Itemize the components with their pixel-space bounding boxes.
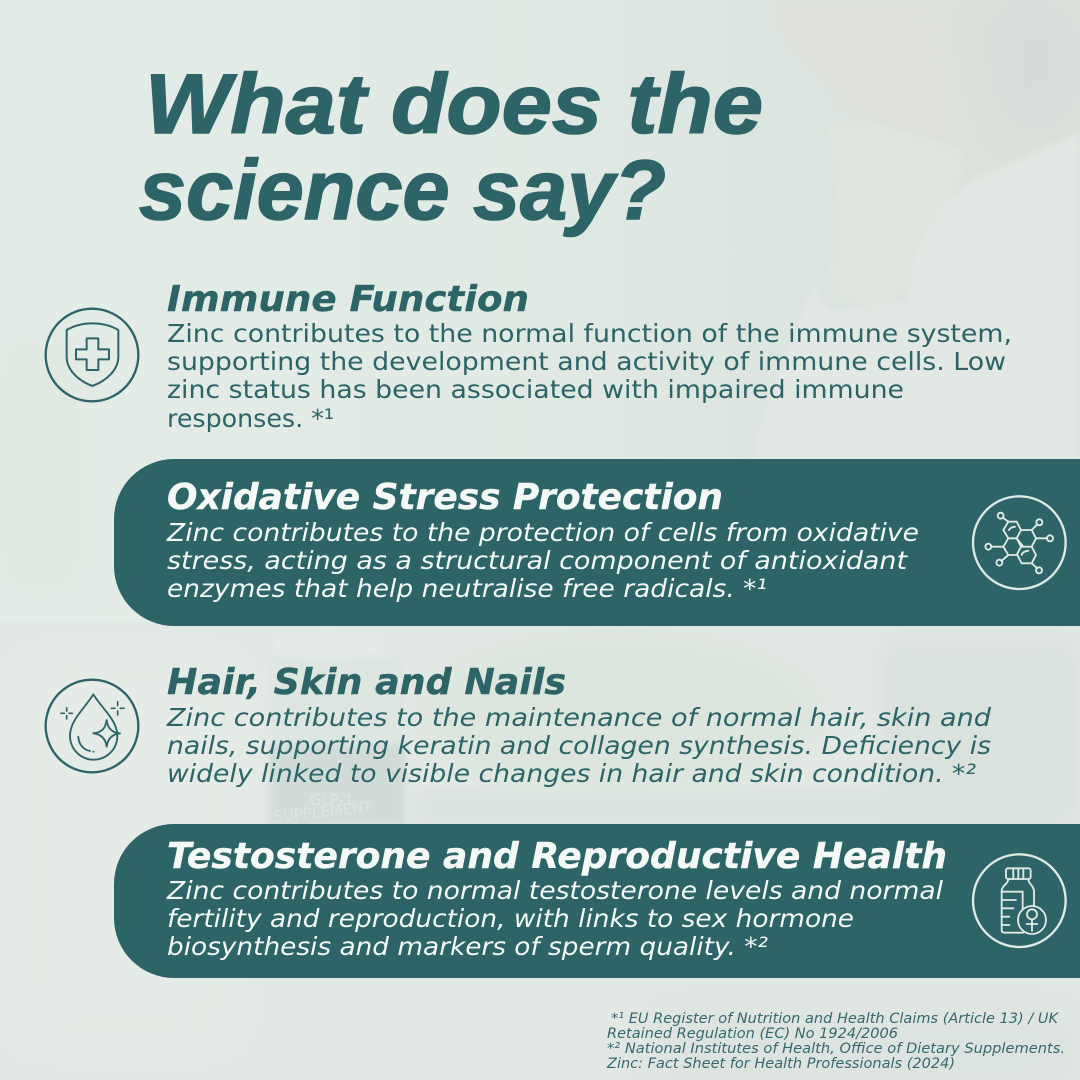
title <box>139 57 763 237</box>
text: hair skin and nails body: nails, supporting keratin and collagen synthesis. Deficiency is <box>167 731 991 760</box>
icon: shield with cross <box>46 309 138 401</box>
bottle label in photo: GLP-1 <box>310 791 354 809</box>
bottle label in photo: SUPPLEMENT <box>273 798 374 826</box>
icon: molecule <box>973 496 1066 589</box>
title: What does the <box>145 57 763 151</box>
text: hair skin and nails body: widely linked to visible changes in hair and skin condition. *² <box>167 759 976 788</box>
text: hair skin and nails body <box>166 703 991 788</box>
panel: immune function <box>46 279 1012 433</box>
text: testosterone body: biosynthesis and markers of sperm quality. *² <box>167 932 768 961</box>
text: testosterone body: fertility and reproduction, with links to sex hormone <box>167 904 854 933</box>
text: immune function body: responses. *¹ <box>167 404 334 433</box>
heading: hair skin and nails: Hair, Skin and Nails <box>167 662 566 703</box>
icon: water drop with sparkle <box>46 680 138 772</box>
text: oxidative stress body: stress, acting as a structural component of antioxidant <box>167 546 908 575</box>
heading: immune function: Immune Function <box>167 279 529 320</box>
text: immune function body: zinc status has been associated with impaired immune <box>167 375 904 404</box>
text: oxidative stress body: Zinc contributes to the protection of cells from oxidative <box>166 518 919 547</box>
text: hair skin and nails body: Zinc contributes to the maintenance of normal hair, skin and <box>166 703 991 732</box>
text: immune function body: Zinc contributes to the normal function of the immune system, <box>167 319 1012 348</box>
panel: hair skin and nails <box>46 662 991 788</box>
panel: oxidative stress protection <box>114 459 1080 626</box>
text: immune function body <box>167 319 1012 433</box>
text: immune function body: supporting the development and activity of immune cells. Low <box>167 347 1006 376</box>
heading: testosterone and reproductive health: Testosterone and Reproductive Health <box>167 836 947 877</box>
icon: supplement bottle with female symbol <box>973 854 1066 947</box>
footnotes <box>606 1011 1065 1072</box>
footnotes: *¹ EU Register of Nutrition and Health Claims (Article 13) / UK <box>611 1011 1059 1027</box>
footnotes: *² National Institutes of Health, Office of Dietary Supplements. <box>607 1041 1065 1057</box>
heading: oxidative stress protection: Oxidative Stress Protection <box>167 477 723 518</box>
text: oxidative stress body <box>166 518 919 603</box>
footnotes: Retained Regulation (EC) No 1924/2006 <box>607 1026 898 1042</box>
title: science say? <box>139 143 666 237</box>
text: oxidative stress body: enzymes that help neutralise free radicals. *¹ <box>167 574 767 603</box>
text: testosterone body <box>166 876 943 961</box>
text: testosterone body: Zinc contributes to normal testosterone levels and normal <box>166 876 943 905</box>
footnotes: Zinc: Fact Sheet for Health Professionals (2024) <box>606 1056 955 1072</box>
panel: testosterone and reproductive health <box>114 824 1080 978</box>
